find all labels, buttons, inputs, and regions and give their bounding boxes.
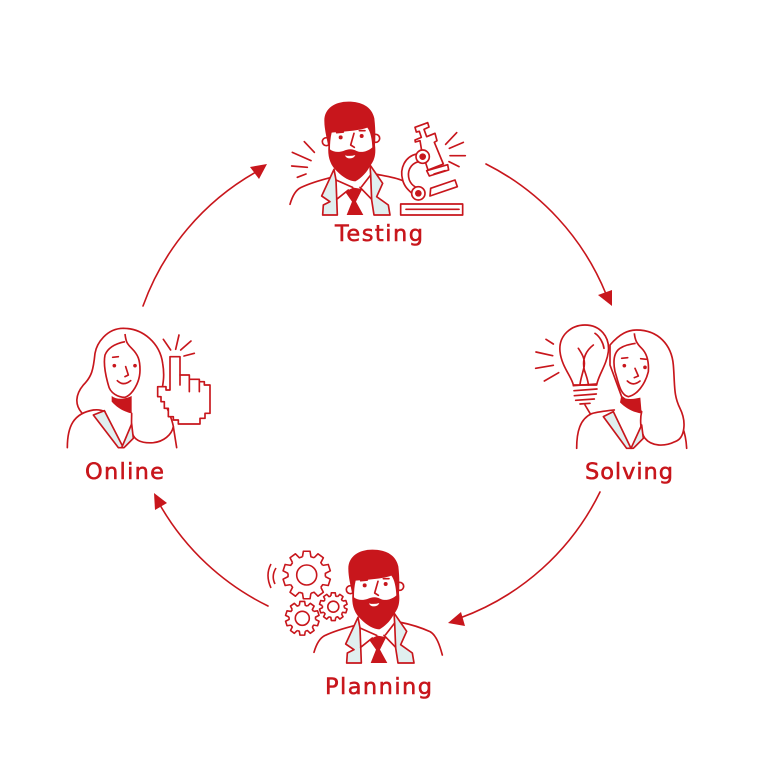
- icon: online woman with cursor hand: [67, 328, 210, 448]
- arrow: planning to online: [154, 493, 268, 606]
- label: Online: Online: [85, 459, 164, 485]
- icon: solving woman with light bulb: [536, 325, 687, 448]
- arrow: testing to solving: [486, 164, 612, 306]
- icon: bearded man: [290, 102, 403, 215]
- icon: woman: [577, 330, 687, 448]
- icon: woman: [67, 328, 177, 448]
- icon: cursor hand: [158, 335, 210, 424]
- icon: light bulb: [536, 325, 609, 413]
- icon: bearded man: [314, 550, 442, 663]
- arrow: online to testing: [143, 164, 267, 306]
- icon: microscope: [401, 123, 463, 215]
- label: Solving: Solving: [585, 459, 673, 485]
- arrow: solving to planning: [448, 492, 600, 626]
- label: Planning: Planning: [325, 674, 432, 700]
- label: Testing: Testing: [334, 221, 423, 247]
- icon: testing scientist with microscope: [290, 102, 465, 215]
- icon: gears: [268, 551, 348, 635]
- icon: sparks: [292, 133, 465, 177]
- icon: planning man with gears: [268, 550, 442, 663]
